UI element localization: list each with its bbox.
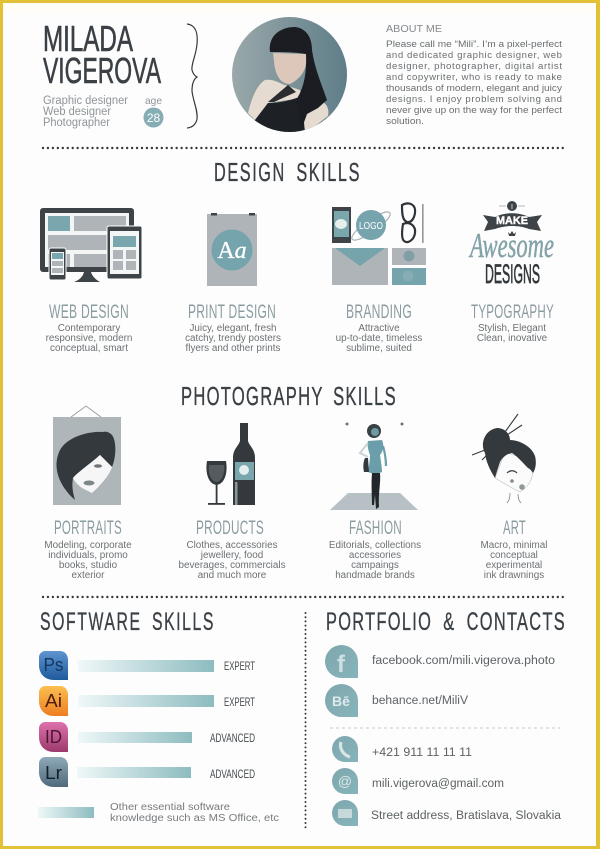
about me: solution. xyxy=(386,116,424,127)
heading: software skills: SOFTWARE SKILLS xyxy=(40,608,215,636)
heading: design skills: DESIGN SKILLS xyxy=(214,157,361,187)
header: name: VIGEROVA xyxy=(43,50,161,91)
print design: catchy, trendy posters xyxy=(185,333,281,344)
branding xyxy=(336,302,422,354)
portraits: exterior xyxy=(72,570,105,581)
heading: photography skills: PHOTOGRAPHY SKILLS xyxy=(181,381,397,411)
software: indesign: ADVANCED xyxy=(210,733,255,745)
header: name xyxy=(43,18,161,91)
about me: thousands of modern, elegant and juicy xyxy=(386,83,562,94)
contact: behance: behance.net/MiliV xyxy=(372,695,468,707)
software: lightroom xyxy=(39,757,255,787)
about me: designs. I enjoy problem solving and xyxy=(386,94,562,105)
art: Macro, minimal xyxy=(481,540,547,551)
print design: PRINT DESIGN xyxy=(188,302,276,323)
fashion: campaings xyxy=(351,560,399,571)
about me: ABOUT ME xyxy=(386,24,442,35)
products: Clothes, accessories xyxy=(186,540,278,551)
icon: typography lettering xyxy=(469,201,554,289)
products: and much more xyxy=(198,570,267,581)
contact: email: mili.vigerova@gmail.com xyxy=(372,778,504,790)
about me: designer, photographer, digital artist xyxy=(386,61,562,72)
age badge xyxy=(144,95,164,128)
contact: facebook: f xyxy=(337,651,346,678)
fashion: FASHION xyxy=(349,518,402,539)
portraits: books, studio xyxy=(59,560,118,571)
branding: sublime, suited xyxy=(346,343,412,354)
contact: address xyxy=(332,800,562,826)
icon: print poster: Aa xyxy=(217,238,247,264)
software: illustrator xyxy=(39,686,255,716)
about me: never give up on the way for the perfect xyxy=(386,105,562,116)
age badge: age xyxy=(145,95,162,107)
icon: portrait poster xyxy=(53,406,121,505)
fashion: Editorials, collections xyxy=(329,540,421,551)
products: jewellery, food xyxy=(200,550,263,561)
software: lightroom: Lr xyxy=(45,763,62,783)
about me: and dedicated graphic designer, web xyxy=(386,50,562,61)
header: name: MILADA xyxy=(43,18,133,59)
software: photoshop: EXPERT xyxy=(224,661,255,673)
web design: Contemporary xyxy=(58,323,120,334)
icon: branding set: LOGO xyxy=(359,221,383,232)
software: photoshop: Ps xyxy=(44,655,64,675)
products: PRODUCTS xyxy=(196,518,264,539)
typography: Stylish, Elegant xyxy=(478,323,546,334)
art xyxy=(481,518,547,581)
icon: typography lettering: MAKE xyxy=(496,215,528,227)
portraits: PORTRAITS xyxy=(54,518,122,539)
software: other xyxy=(38,802,279,824)
icon: typography lettering: Awesome xyxy=(469,226,554,265)
age badge: 28 xyxy=(147,111,160,125)
contact: facebook xyxy=(325,645,555,678)
software: photoshop xyxy=(39,651,255,680)
web design xyxy=(46,302,132,354)
typography xyxy=(471,302,554,344)
web design: WEB DESIGN xyxy=(49,302,129,323)
art: ART xyxy=(503,518,526,539)
portraits xyxy=(44,518,132,581)
contact: phone: +421 911 11 11 11 xyxy=(372,747,472,759)
about me: Please call me “Mili”. I’m a pixel-perfect xyxy=(386,39,562,50)
contact: behance xyxy=(325,684,468,717)
contact: email xyxy=(332,768,504,794)
software: lightroom: ADVANCED xyxy=(210,769,255,781)
art: experimental xyxy=(486,560,542,571)
software: illustrator: Ai xyxy=(45,691,62,711)
fashion xyxy=(329,518,421,581)
contact: phone xyxy=(332,736,472,762)
software: indesign: ID xyxy=(45,727,62,747)
software: other: knowledge such as MS Office, etc xyxy=(110,813,279,824)
web design: responsive, modern xyxy=(46,333,132,344)
icon: typography lettering: I xyxy=(511,204,513,211)
print design: flyers and other prints xyxy=(186,343,281,354)
software: other: Other essential software xyxy=(110,802,230,813)
software: illustrator: EXPERT xyxy=(224,697,255,709)
icon: responsive devices xyxy=(40,208,142,282)
products: beverages, commercials xyxy=(178,560,286,571)
contact: facebook: facebook.com/mili.vigerova.photo xyxy=(372,655,555,667)
icon: art geisha xyxy=(472,414,536,503)
contact: email: @ xyxy=(338,773,352,789)
icon: wine and bottle xyxy=(206,423,255,505)
portrait photo xyxy=(232,17,348,135)
contact: behance: Bē xyxy=(332,693,350,709)
curly brace xyxy=(187,24,197,128)
icon: fashion model xyxy=(330,422,418,510)
contact: address: Street address, Bratislava, Slovakia xyxy=(371,810,562,822)
art: conceptual xyxy=(490,550,538,561)
branding: Attractive xyxy=(358,323,400,334)
icon: branding set xyxy=(332,203,426,285)
print design: Juicy, elegant, fresh xyxy=(189,323,277,334)
about me xyxy=(386,24,562,127)
products xyxy=(178,518,286,581)
branding: BRANDING xyxy=(346,302,412,323)
typography: Clean, inovative xyxy=(477,333,548,344)
header: roles: Graphic designer xyxy=(43,95,128,107)
fashion: handmade brands xyxy=(335,570,415,581)
art: ink drawnings xyxy=(484,570,544,581)
header: roles: Photographer xyxy=(43,117,110,129)
fashion: accessories xyxy=(349,550,401,561)
portraits: individuals, promo xyxy=(48,550,128,561)
portraits: Modeling, corporate xyxy=(44,540,132,551)
header: roles xyxy=(43,95,128,129)
print design xyxy=(185,302,281,354)
icon: print poster xyxy=(207,213,257,286)
software: indesign xyxy=(39,722,255,752)
web design: conceptual, smart xyxy=(50,343,128,354)
header: roles: Web designer xyxy=(43,106,111,118)
about me: and copywriter, who is ready to make xyxy=(386,72,562,83)
branding: up-to-date, timeless xyxy=(336,333,422,344)
